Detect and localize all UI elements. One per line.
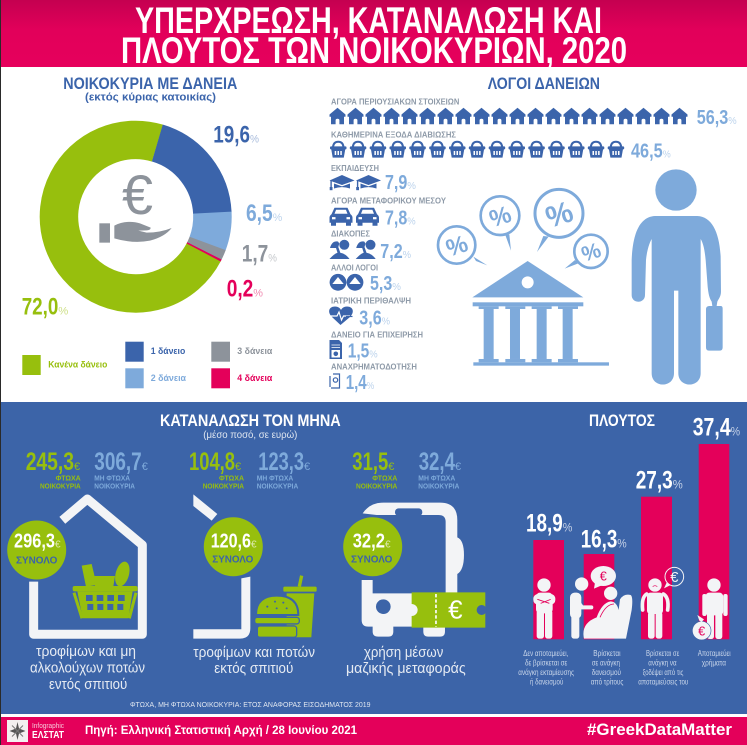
row: education 7,9%: 7,9 [385, 172, 407, 194]
icon: burger and drink [255, 576, 317, 637]
values: food out of home [189, 448, 310, 490]
row: vehicle 7,8%: 7,8 [385, 208, 407, 230]
values: food at home: ΝΟΙΚΟΚΥΡΙΑ [40, 483, 81, 490]
row: business loan 1,5%: % [369, 350, 378, 361]
heading: monthly consumption: ΚΑΤΑΝΑΛΩΣΗ ΤΟΝ ΜΗΝΑ [160, 411, 341, 430]
legend: 2 δάνεια [151, 373, 186, 384]
row: medical care 3,6%: 3,6 [359, 307, 382, 329]
value: 27,3%: 27,3 [636, 466, 673, 494]
caption: food out of home [193, 645, 315, 677]
values: food at home: € [74, 461, 80, 473]
row: education 7,9% [330, 164, 416, 194]
row: assets 56,3%: % [728, 116, 737, 127]
row: assets 56,3%: 56,3 [697, 107, 728, 129]
icon: person with briefcase [632, 169, 723, 385]
icon: bus with euro ticket [362, 503, 487, 637]
values: public transport: € [455, 461, 461, 473]
row: daily living 46,5% [330, 131, 671, 162]
caption: needs to borrow: από τρίτους [591, 677, 624, 686]
row: other reasons 5,3% [330, 264, 401, 295]
heading: households with loans [63, 74, 237, 104]
caption: needs to borrow: δανεισμού [592, 668, 621, 677]
values: food at home: ΜΗ ΦΤΩΧΑ [94, 475, 130, 482]
left edge line [0, 0, 1, 745]
panel: wealth [518, 411, 740, 686]
badge: total 296,3: € [55, 540, 61, 551]
row: daily living 46,5%: ΚΑΘΗΜΕΡΙΝΑ ΕΞΟΔΑ ΔΙΑΒΙΩΣΗΣ [331, 131, 456, 140]
value: 37,4%: % [731, 425, 740, 439]
value: 19,6%: 19,6 [213, 121, 250, 148]
icon: worried person with euro bubble [642, 567, 684, 639]
icon: person with money bag: € [698, 624, 705, 638]
value: 72,0%: 72,0 [22, 293, 58, 320]
icon: person with money bag [692, 578, 728, 640]
value: 1,7%: 1,7 [242, 241, 268, 268]
caption: food out of home: τροφίμων και ποτών [193, 645, 315, 661]
values: food at home: € [142, 461, 148, 473]
row: medical care 3,6%: ΙΑΤΡΙΚΗ ΠΕΡΙΘΑΛΨΗ [331, 296, 411, 305]
value: 18,9%: 18,9 [526, 510, 563, 538]
title banner: ΠΛΟΥΤΟΣ ΤΩΝ ΝΟΙΚΟΚΥΡΙΩΝ, 2020 [121, 30, 627, 71]
icon: bus with euro ticket: € [448, 594, 463, 624]
row: business loan 1,5%: 1,5 [348, 341, 369, 363]
row: education 7,9%: ΕΚΠΑΙΔΕΥΣΗ [331, 164, 379, 173]
badge: total 32,2 [343, 517, 402, 576]
value: 0,2%: 0,2 [227, 276, 253, 303]
row: medical care 3,6% [329, 296, 411, 329]
legend: 1 δάνειο [151, 346, 185, 357]
values: food out of home: ΝΟΙΚΟΚΥΡΙΑ [257, 483, 298, 490]
caption: does not save: ή δανεισμού [530, 677, 563, 686]
badge: total 120,6: 120,6 [211, 530, 251, 552]
caption: does not save: ανάγκη εκταμίευσης [518, 668, 574, 677]
icon: euro over hand [99, 163, 172, 243]
legend [22, 342, 272, 388]
caption: public transport: χρήση μέσων [364, 645, 443, 661]
row: business loan 1,5% [330, 330, 423, 363]
heading: wealth: ΠΛΟΥΤΟΣ [589, 411, 655, 430]
heading: households with loans: (εκτός κύριας κατοικίας) [85, 92, 216, 104]
title banner [0, 0, 747, 71]
row: other reasons 5,3%: ΑΛΛΟΙ ΛΟΓΟΙ [331, 264, 378, 273]
icon: house fragment [193, 494, 250, 639]
row: other reasons 5,3%: % [392, 282, 401, 293]
values: food out of home: € [304, 461, 310, 473]
values: public transport: € [388, 461, 394, 473]
title banner: ΥΠΕΡΧΡΕΩΣΗ, ΚΑΤΑΝΑΛΩΣΗ ΚΑΙ [135, 0, 602, 41]
icon: euro over hand: € [122, 163, 153, 226]
badge: total 296,3: 296,3 [14, 531, 55, 553]
values: food out of home: 123,3 [258, 448, 304, 476]
value: 16,3%: % [617, 537, 627, 551]
value: 0,2%: % [253, 288, 263, 300]
row: medical care 3,6%: % [382, 316, 390, 327]
logo: ELSTAT [7, 720, 64, 742]
badge: total 32,2: € [385, 539, 391, 550]
row: holidays 7,2%: 7,2 [380, 241, 403, 263]
row: vehicle 7,8% [330, 196, 447, 230]
values: food at home: 245,3 [26, 448, 74, 476]
values: food out of home: ΜΗ ΦΤΩΧΑ [257, 475, 293, 482]
icon: person asking a seated person with euro bubble [570, 566, 632, 639]
values: food out of home: 104,8 [189, 448, 235, 476]
caption: food at home [30, 644, 145, 693]
row: other reasons 5,3%: 5,3 [370, 273, 392, 295]
caption: needs to borrow: Βρίσκεται [593, 649, 621, 658]
badge: total 120,6: € [251, 539, 257, 550]
caption: food at home: εντός σπιτιού [49, 677, 127, 693]
caption: saves money: Αποταμιεύει [698, 649, 731, 658]
values: food out of home: € [235, 461, 241, 473]
caption: public transport: μαζικής μεταφοράς [346, 661, 466, 677]
logo: ELSTAT: Infographic [32, 723, 64, 730]
values: public transport: 32,4 [419, 448, 455, 476]
value: 16,3%: 16,3 [581, 526, 617, 554]
caption: food at home: αλκολούχων ποτών [30, 661, 145, 677]
panel: monthly consumption and wealth background [0, 402, 747, 714]
row: business loan 1,5%: ΔΑΝΕΙΟ ΓΙΑ ΕΠΙΧΕΙΡΗΣΗ [331, 330, 423, 339]
caption: saves money: χρήματα [702, 658, 726, 667]
caption: food out of home: εκτός σπιτιού [214, 661, 293, 677]
row: daily living 46,5%: % [663, 149, 671, 160]
row: daily living 46,5%: 46,5 [631, 140, 663, 162]
badge: total 120,6: ΣΥΝΟΛΟ [212, 554, 254, 565]
values: public transport: 31,5 [352, 448, 388, 476]
icon: bank with percent bubbles: % [443, 230, 471, 263]
values: food out of home: ΝΟΙΚΟΚΥΡΙΑ [203, 483, 244, 490]
badge: total 296,3 [7, 520, 66, 580]
row: holidays 7,2%: % [403, 250, 411, 261]
values: public transport [352, 448, 461, 490]
icon: house outline [34, 499, 142, 634]
heading: monthly consumption: (μέσο ποσό, σε ευρώ) [203, 429, 297, 441]
row: education 7,9%: % [407, 181, 416, 192]
legend: 4 δάνεια [237, 373, 272, 384]
logo: ELSTAT: ΕΛΣΤΑΤ [32, 730, 64, 741]
heading: reasons for loans: ΛΟΓΟΙ ΔΑΝΕΙΩΝ [488, 74, 600, 93]
row: refinancing 1,4%: 1,4 [346, 372, 367, 394]
caption: does not save [518, 649, 574, 686]
values: food at home: ΦΤΩΧΑ [56, 475, 81, 482]
caption: saves money [698, 649, 731, 667]
values: food at home: ΝΟΙΚΟΚΥΡΙΑ [94, 483, 135, 490]
values: food at home [26, 448, 148, 490]
caption: needs to spend savings: ανάγκη να [648, 658, 677, 667]
bar chart [533, 444, 729, 639]
icon: bank with percent bubbles: % [579, 238, 604, 267]
row: assets 56,3%: ΑΓΟΡΑ ΠΕΡΙΟΥΣΙΑΚΩΝ ΣΤΟΙΧΕΙΩΝ [331, 97, 460, 106]
caption: needs to spend savings: Βρίσκεται σε [646, 649, 680, 658]
panel: monthly consumption [7, 411, 487, 709]
icon: bank with percent bubbles: % [486, 201, 515, 233]
icon: worried person with euro bubble: € [670, 570, 678, 586]
badge: total 32,2: 32,2 [353, 530, 385, 552]
heading: monthly consumption [160, 411, 341, 441]
value: 27,3%: % [673, 477, 683, 491]
values: food at home: 306,7 [94, 448, 142, 476]
row: refinancing 1,4%: % [367, 381, 374, 392]
footnote: ΦΤΩΧΑ, ΜΗ ΦΤΩΧΑ ΝΟΙΚΟΚΥΡΙΑ: ΕΤΟΣ ΑΝΑΦΟΡΑΣ ΕΙΣΟΔΗΜΑΤΟΣ 2019 [130, 700, 370, 709]
caption: does not save: Δεν αποταμιεύει, [523, 649, 568, 658]
panel: households with loans [22, 74, 282, 388]
caption: food at home: τροφίμων και μη [36, 644, 136, 660]
caption: does not save: δε βρίσκεται σε [525, 658, 568, 667]
icon: person asking a seated person with euro bubble: € [600, 570, 607, 584]
caption: public transport [346, 645, 466, 677]
row: refinancing 1,4%: ΑΝΑΧΡΗΜΑΤΟΔΟΤΗΣΗ [331, 362, 417, 371]
value: 19,6%: % [250, 133, 259, 145]
caption: needs to borrow [591, 649, 624, 686]
heading: households with loans: ΝΟΙΚΟΚΥΡΙΑ ΜΕ ΔΑΝΕΙΑ [63, 74, 237, 93]
values: public transport: ΜΗ ΦΤΩΧΑ [418, 475, 455, 482]
icon: bank with percent bubbles: % [542, 195, 577, 235]
value: 6,5%: % [273, 212, 282, 224]
value: 72,0%: % [58, 305, 69, 317]
icon: person arms crossed [533, 578, 555, 639]
panel: reasons for loans [329, 74, 737, 394]
donut chart [32, 113, 239, 320]
caption: needs to borrow: σε ανάγκη [592, 658, 620, 667]
icon: shopping basket [73, 560, 138, 618]
source line: Πηγή: Ελληνική Στατιστική Αρχή / 28 Ιουνίου 2021 [85, 725, 358, 737]
badge: total 120,6 [204, 517, 263, 576]
row: holidays 7,2% [330, 230, 411, 263]
icon: bank with percent bubbles [438, 189, 609, 366]
row: vehicle 7,8%: ΑΓΟΡΑ ΜΕΤΑΦΟΡΙΚΟΥ ΜΕΣΟΥ [331, 196, 447, 205]
values: public transport: ΦΤΩΧΑ [372, 475, 397, 482]
values: public transport: ΝΟΙΚΟΚΥΡΙΑ [418, 483, 459, 490]
values: food out of home: ΦΤΩΧΑ [219, 475, 244, 482]
badge: total 32,2: ΣΥΝΟΛΟ [351, 554, 393, 565]
values: public transport: ΝΟΙΚΟΚΥΡΙΑ [356, 483, 397, 490]
hashtag: #GreekDataMatter [587, 720, 732, 739]
badge: total 296,3: ΣΥΝΟΛΟ [16, 555, 58, 566]
row: assets 56,3% [330, 97, 737, 129]
value: 6,5%: 6,5 [246, 200, 273, 227]
footer [0, 717, 747, 745]
row: holidays 7,2%: ΔΙΑΚΟΠΕΣ [331, 230, 370, 239]
caption: needs to spend savings: αποταμιεύσεις του [638, 677, 688, 686]
legend: 3 δάνεια [237, 346, 272, 357]
caption: needs to spend savings: ξοδέψει από τις [643, 668, 684, 677]
row: vehicle 7,8%: % [407, 217, 416, 228]
legend: Κανένα δάνειο [48, 359, 107, 370]
caption: needs to spend savings [638, 649, 688, 686]
row: refinancing 1,4% [330, 362, 417, 394]
value: 18,9%: % [563, 521, 573, 535]
value: 37,4%: 37,4 [693, 414, 731, 442]
value: 1,7%: % [268, 253, 277, 265]
